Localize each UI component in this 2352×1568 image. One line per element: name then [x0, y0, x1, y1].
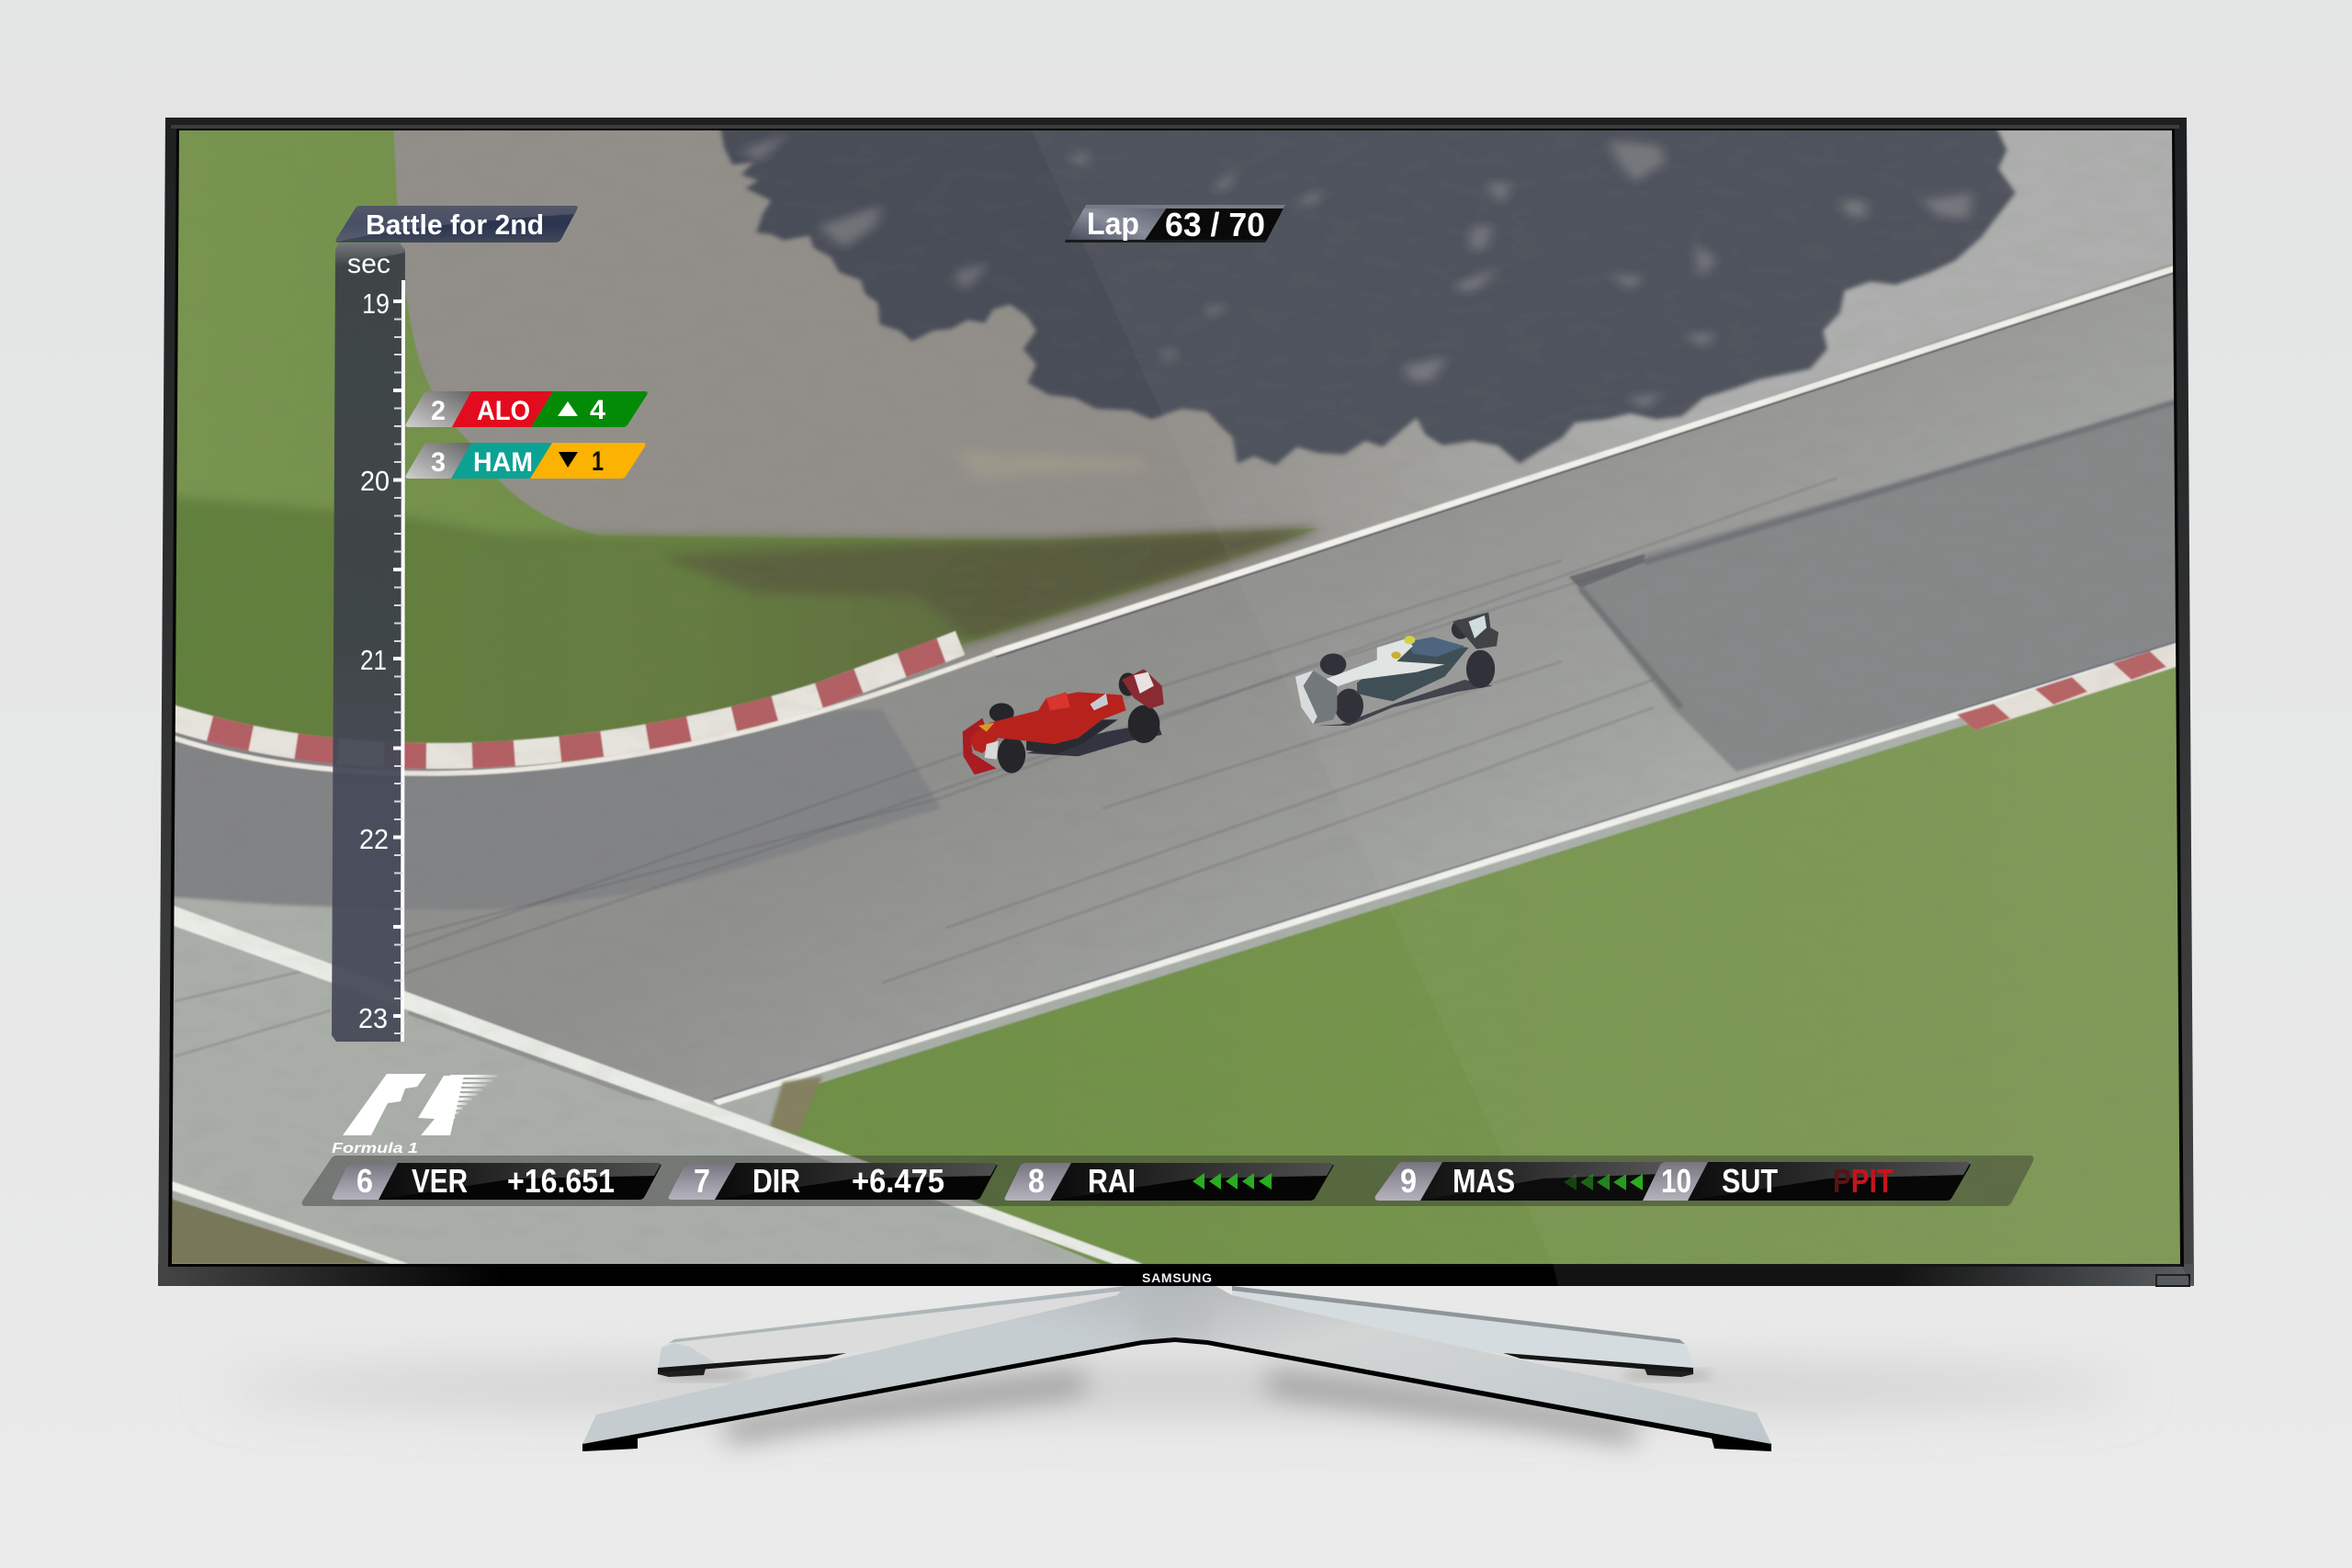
tv stand — [582, 1286, 1771, 1451]
upper runoff — [393, 130, 1558, 656]
lap counter: Lap — [1087, 207, 1139, 242]
scale labels: 20 — [360, 465, 390, 497]
bezel reflection — [1553, 1264, 2194, 1286]
diagonal white line — [156, 899, 1143, 1264]
panel highlight — [335, 243, 405, 266]
down triangle — [559, 452, 578, 468]
scale labels: 19 — [362, 288, 390, 320]
black inner rim — [168, 129, 2184, 1267]
dark pit patch — [1569, 395, 2205, 772]
grass mid darker — [156, 496, 1320, 753]
driver tag: alonso: 4 — [590, 395, 605, 425]
title tag: battle for 2nd — [335, 206, 578, 243]
driver tag: hamilton: HAM — [473, 447, 533, 478]
scale ticks — [394, 320, 402, 1033]
driver tag: hamilton — [405, 443, 646, 479]
scale labels — [358, 288, 390, 1034]
chip: 7 DIR: +6.475 — [852, 1162, 944, 1200]
lower left white line — [156, 1176, 409, 1264]
sand streak — [956, 450, 1158, 478]
grass top-left — [156, 110, 1320, 762]
power button — [2156, 1275, 2189, 1286]
driver tag: alonso — [405, 391, 648, 427]
scale labels: 23 — [358, 1002, 388, 1034]
grass bottom-right — [770, 658, 2205, 1282]
chip: 9 MAS — [1374, 1162, 1668, 1201]
chip: 9 MAS: 9 — [1400, 1162, 1417, 1200]
scale labels: 22 — [359, 823, 389, 855]
mottled texture — [165, 129, 2187, 1268]
floor shadow — [220, 1365, 2132, 1433]
chip: 7 DIR — [668, 1162, 998, 1200]
tv bezel — [158, 118, 2194, 1286]
screen scene — [138, 110, 2214, 1286]
formula 1 wordmark: Formula 1 — [332, 1141, 418, 1156]
tyre marks — [175, 478, 1838, 1056]
reflection — [1032, 130, 2180, 1264]
kerb white base — [156, 643, 960, 756]
scale line — [401, 280, 405, 1042]
up triangle — [558, 401, 578, 416]
ticker band — [302, 1156, 2034, 1206]
car: mercedes — [1295, 613, 1498, 726]
driver tag: alonso: 2 — [431, 396, 446, 426]
track edge white line — [992, 255, 2205, 656]
kerb red blocks — [156, 643, 960, 756]
stand: back left leg — [658, 1286, 1125, 1377]
right kerb — [1957, 634, 2205, 730]
kerb white line — [156, 652, 997, 773]
dark asphalt corner — [156, 709, 941, 909]
brown scuffed edge — [662, 529, 1320, 639]
stand: front left leg — [582, 1286, 1175, 1444]
title tag: battle for 2nd: Battle for 2nd — [366, 209, 544, 241]
chip: 10 SUT: SUT — [1722, 1162, 1778, 1200]
driver tag: hamilton: 1 — [592, 446, 604, 477]
gain arrows — [1564, 1174, 1643, 1190]
brand: SAMSUNG — [1142, 1270, 1212, 1285]
lap counter: 63 / 70 — [1165, 206, 1265, 243]
chip: 10 SUT: 10 — [1661, 1162, 1691, 1200]
chip: 6 VER: +16.651 — [507, 1162, 615, 1200]
driver tag: hamilton: 3 — [431, 447, 446, 478]
lighter apron bottom-left — [408, 1014, 639, 1100]
asphalt base — [174, 716, 1969, 1264]
pit status: PPIT — [1833, 1162, 1894, 1200]
seconds unit: sec — [347, 249, 390, 279]
chip: 6 VER: 6 — [356, 1162, 373, 1200]
chip: 6 VER — [332, 1162, 662, 1200]
stand: back right leg — [1232, 1286, 1693, 1377]
stand: front black underside — [582, 1334, 1771, 1451]
chip: 8 RAI — [1004, 1162, 1334, 1201]
gain arrows — [1193, 1173, 1272, 1190]
timing panel — [332, 243, 405, 1042]
bottom ticker — [302, 1156, 2034, 1206]
chip: 6 VER: VER — [412, 1162, 468, 1200]
car: ferrari — [963, 669, 1164, 774]
chip: 10 SUT — [1643, 1162, 1971, 1201]
chip: 8 RAI: 8 — [1028, 1162, 1045, 1200]
stand: front right leg — [1175, 1286, 1771, 1444]
television — [138, 110, 2214, 1286]
driver tag: alonso: ALO — [477, 396, 530, 426]
chip: 8 RAI: RAI — [1088, 1162, 1136, 1200]
f1 logo — [332, 1074, 497, 1156]
kerb — [156, 643, 997, 773]
tree shadow — [719, 122, 2016, 466]
main track — [404, 263, 2174, 1102]
brown grass edge — [770, 1077, 822, 1134]
scale labels: 21 — [360, 644, 387, 676]
bottom-left grass patch — [156, 1194, 377, 1264]
chip: 9 MAS: MAS — [1453, 1162, 1515, 1200]
lower track white line — [713, 634, 2205, 1105]
chip: 7 DIR: 7 — [694, 1162, 710, 1200]
chip: 7 DIR: DIR — [752, 1162, 800, 1200]
lap counter — [1065, 205, 1285, 243]
